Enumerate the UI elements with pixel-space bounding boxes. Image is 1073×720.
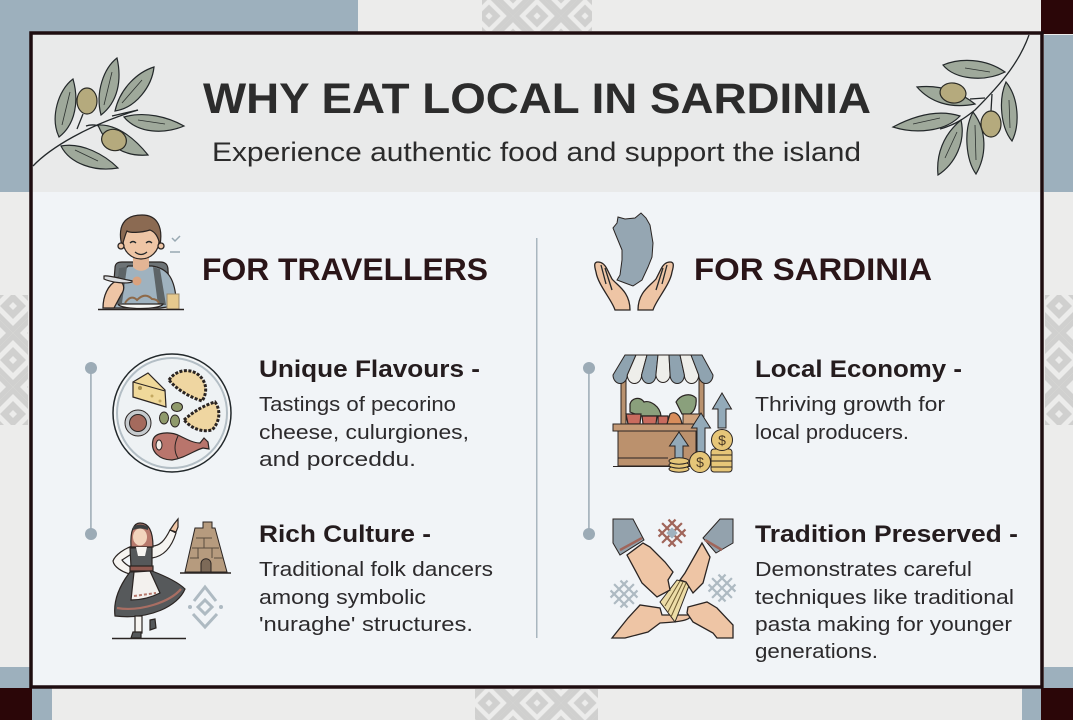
icon: market stall: $ (696, 454, 704, 470)
text: tradition preserved: techniques like traditional (755, 586, 1014, 609)
icon: folk dancer and nuraghe (112, 519, 231, 638)
icon: olive branch right (893, 35, 1029, 175)
icon: hands making pasta (604, 513, 742, 638)
icon: olive branch left (33, 58, 184, 169)
subtitle: Experience authentic food and support the island (212, 137, 861, 167)
icon: hands holding sardinia (595, 213, 673, 310)
icon: market stall (613, 355, 732, 472)
text: local economy: local producers. (755, 421, 909, 444)
text: rich culture (259, 521, 493, 636)
text: tradition preserved: pasta making for younger (755, 613, 1012, 636)
text: tradition preserved: Tradition Preserved - (755, 521, 1018, 548)
text: unique flavours: and porceddu. (259, 448, 416, 471)
text: unique flavours: Unique Flavours - (259, 356, 480, 383)
text: rich culture: Traditional folk dancers (259, 558, 493, 581)
timeline left (85, 362, 97, 540)
center divider (536, 238, 538, 638)
text: tradition preserved (755, 521, 1018, 663)
icon: traveller eating (98, 215, 184, 310)
icon: tasting plate (113, 354, 231, 472)
text: local economy: Local Economy - (755, 356, 962, 383)
text: tradition preserved: generations. (755, 640, 878, 663)
panel: for sardinia (583, 213, 1018, 663)
text: tradition preserved: Demonstrates careful (755, 558, 972, 581)
heading: for sardinia: FOR SARDINIA (694, 251, 932, 287)
text: local economy (755, 356, 962, 444)
text: unique flavours: Tastings of pecorino (259, 393, 456, 416)
heading: for travellers: FOR TRAVELLERS (202, 251, 488, 287)
text: unique flavours (259, 356, 480, 471)
panel: header (31, 34, 1042, 192)
title: WHY EAT LOCAL IN SARDINIA (203, 75, 871, 123)
text: rich culture: among symbolic (259, 586, 426, 609)
panel: for travellers (85, 215, 493, 638)
text: local economy: Thriving growth for (755, 393, 945, 416)
text: rich culture: Rich Culture - (259, 521, 431, 548)
text: rich culture: 'nuraghe' structures. (259, 613, 473, 636)
icon: market stall: $ (718, 432, 726, 448)
panel: content (31, 192, 1042, 687)
timeline right (583, 362, 595, 540)
text: unique flavours: cheese, culurgiones, (259, 421, 469, 444)
